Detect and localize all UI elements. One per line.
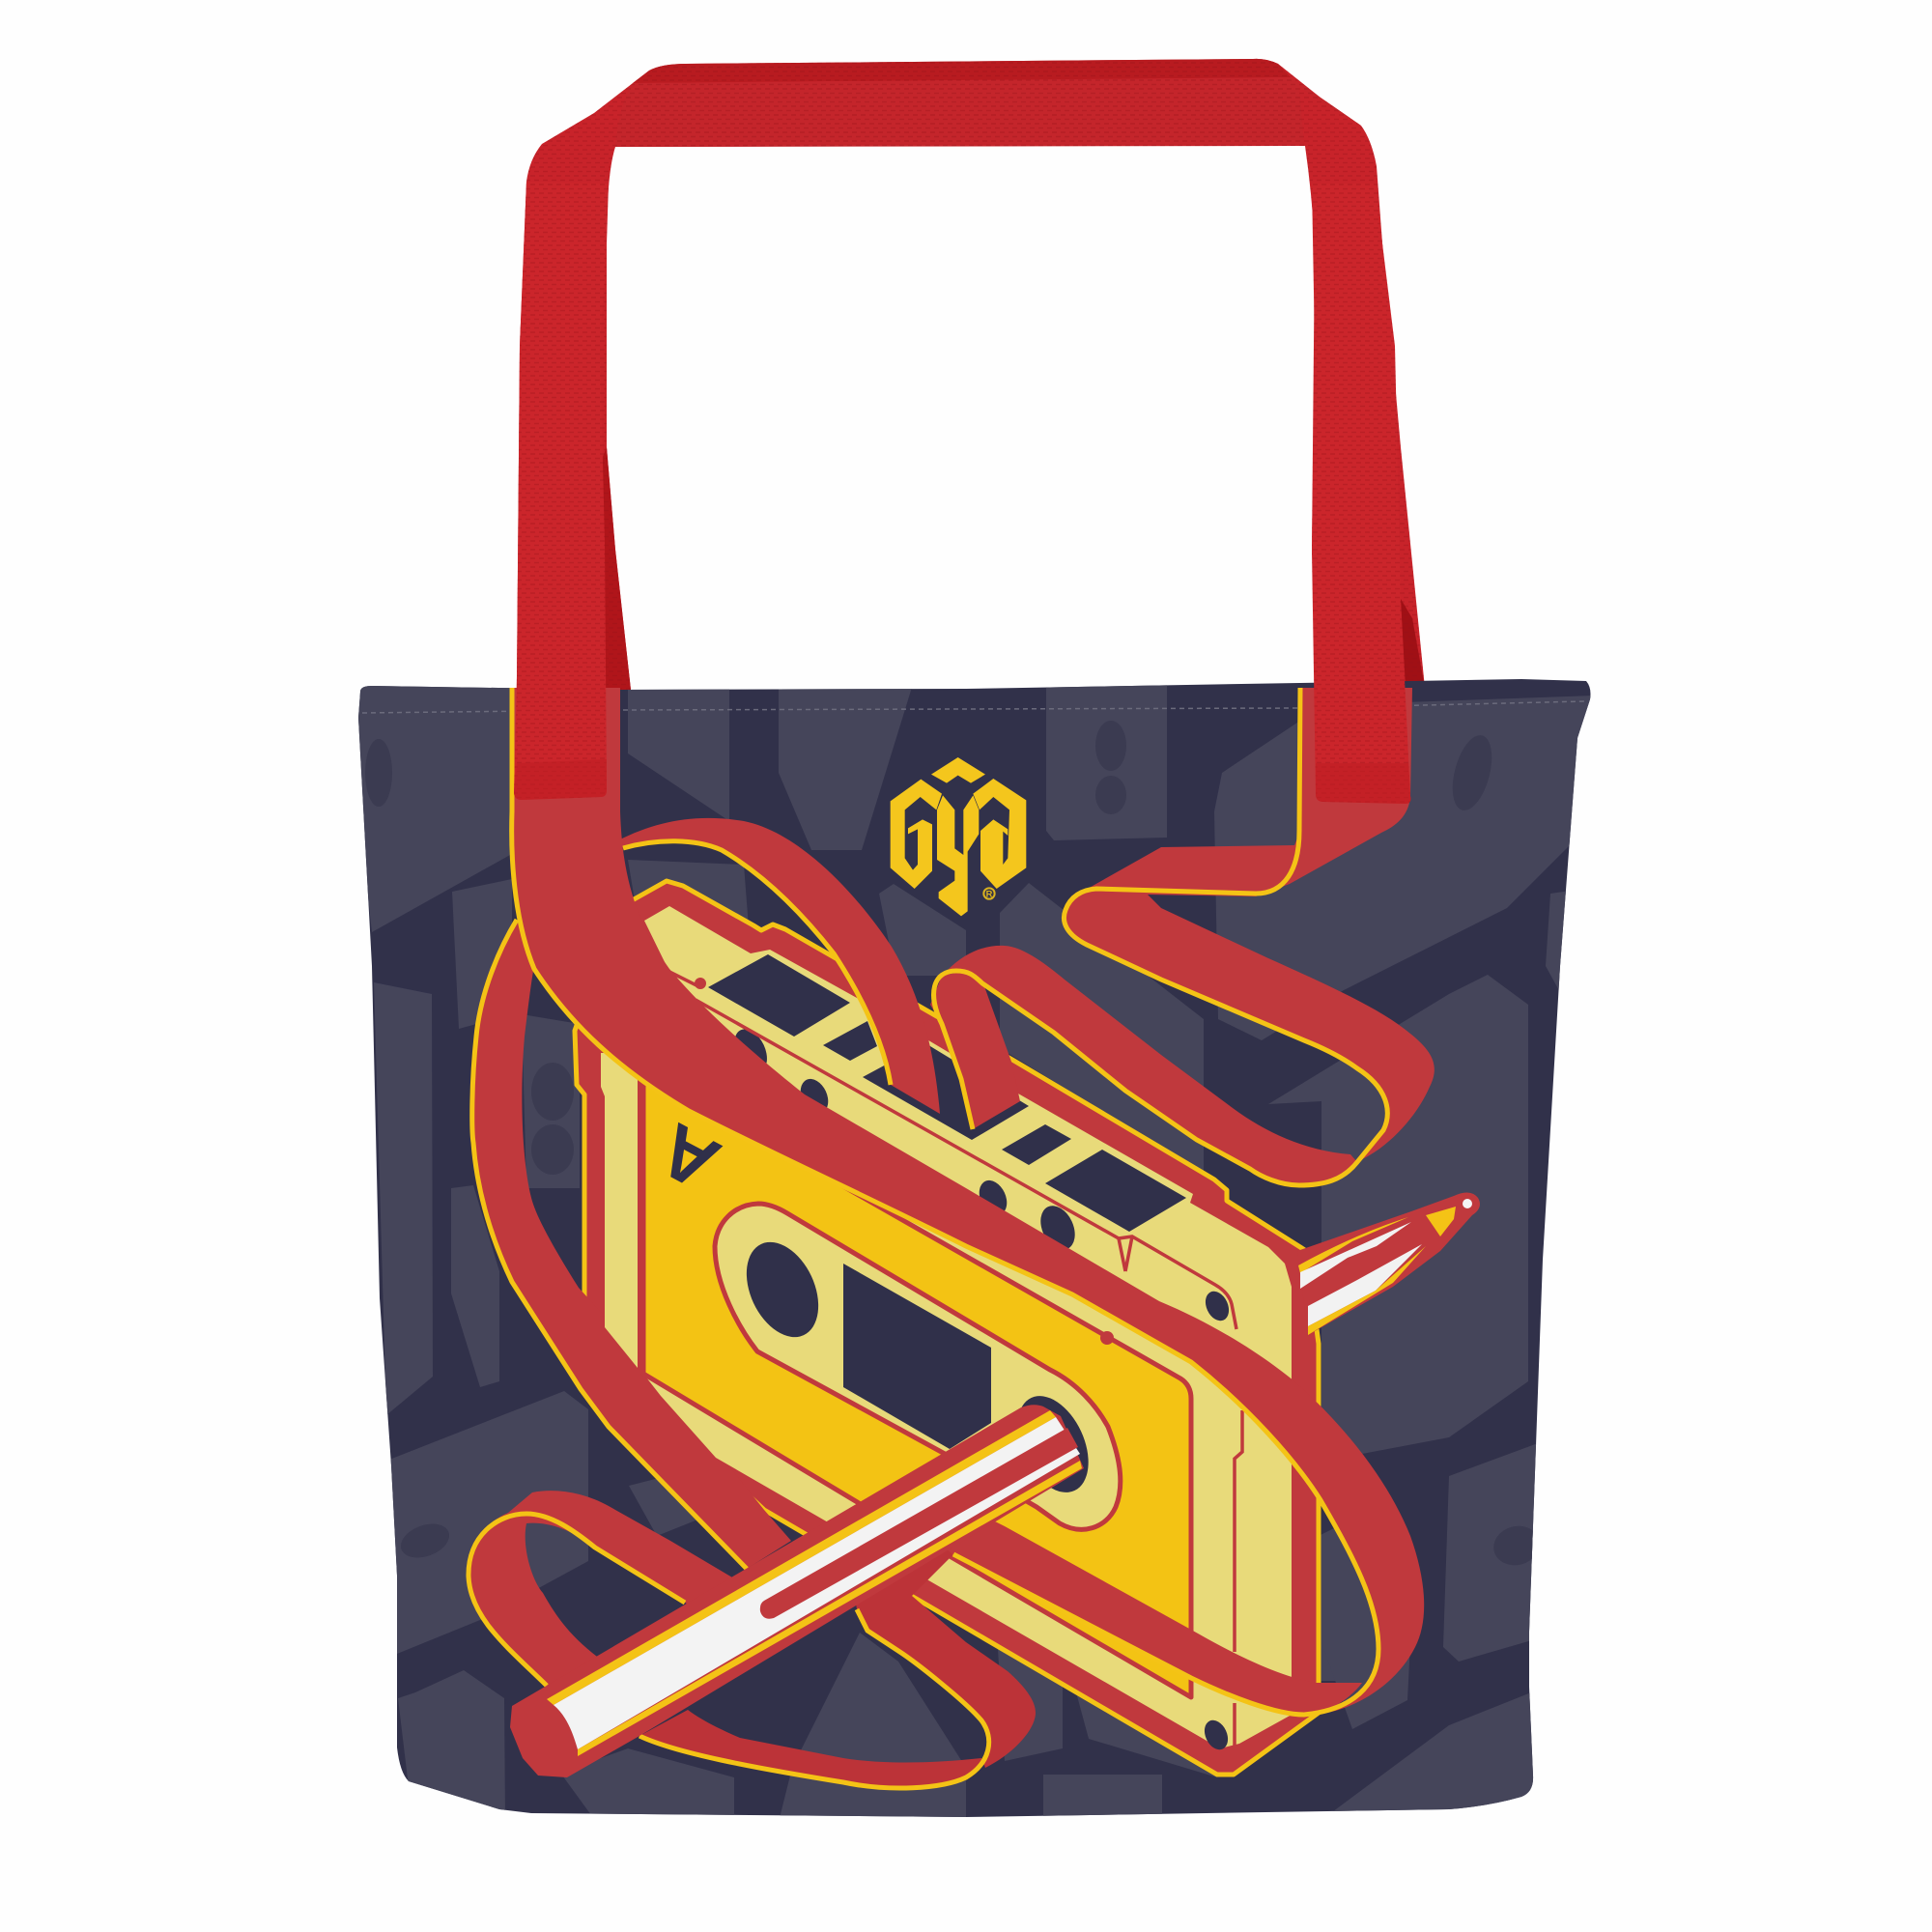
background cassette pattern bbox=[353, 681, 1594, 1826]
logo: GYG hexagon mark: R bbox=[986, 889, 993, 898]
pencil: main barrel through hub bbox=[510, 1405, 1084, 1777]
tape: upper right ribbon from right handle bbox=[930, 688, 1435, 1185]
tape: small loop at lower left bbox=[469, 1491, 744, 1695]
cassette: pale body bbox=[601, 906, 1292, 1748]
handle: right front strap bbox=[1312, 184, 1410, 804]
cassette: red hook marks bbox=[695, 978, 1114, 1345]
pencil: tip end emerging behind cassette bbox=[1297, 1192, 1480, 1335]
cassette: top edge windows and spool holes bbox=[708, 954, 1186, 1256]
handle: back strap and top loop bbox=[517, 59, 1425, 690]
tape: first arch over cassette bbox=[618, 818, 940, 1114]
cassette: hub holes and centre window bbox=[732, 1231, 1102, 1504]
cassette: yellow front face bbox=[643, 1072, 1191, 1697]
bag top stitching bbox=[362, 701, 1584, 713]
cassette: corner screws bbox=[1200, 1288, 1234, 1753]
cassette: red detail lines bbox=[669, 972, 1242, 1746]
handle: left front strap bbox=[514, 182, 609, 800]
logo: GYG hexagon mark bbox=[891, 757, 1026, 916]
tote bag illustration bbox=[358, 58, 1590, 1817]
tape: main front band from left handle bbox=[512, 688, 1424, 1715]
bag body bbox=[358, 679, 1590, 1817]
cassette: hub plate bbox=[715, 1204, 1121, 1529]
cassette body outline bbox=[575, 881, 1319, 1775]
cassette: side A letter: A bbox=[644, 1107, 732, 1208]
tape: bottom loop bbox=[639, 1526, 1036, 1788]
tape: left back band bbox=[472, 920, 791, 1569]
